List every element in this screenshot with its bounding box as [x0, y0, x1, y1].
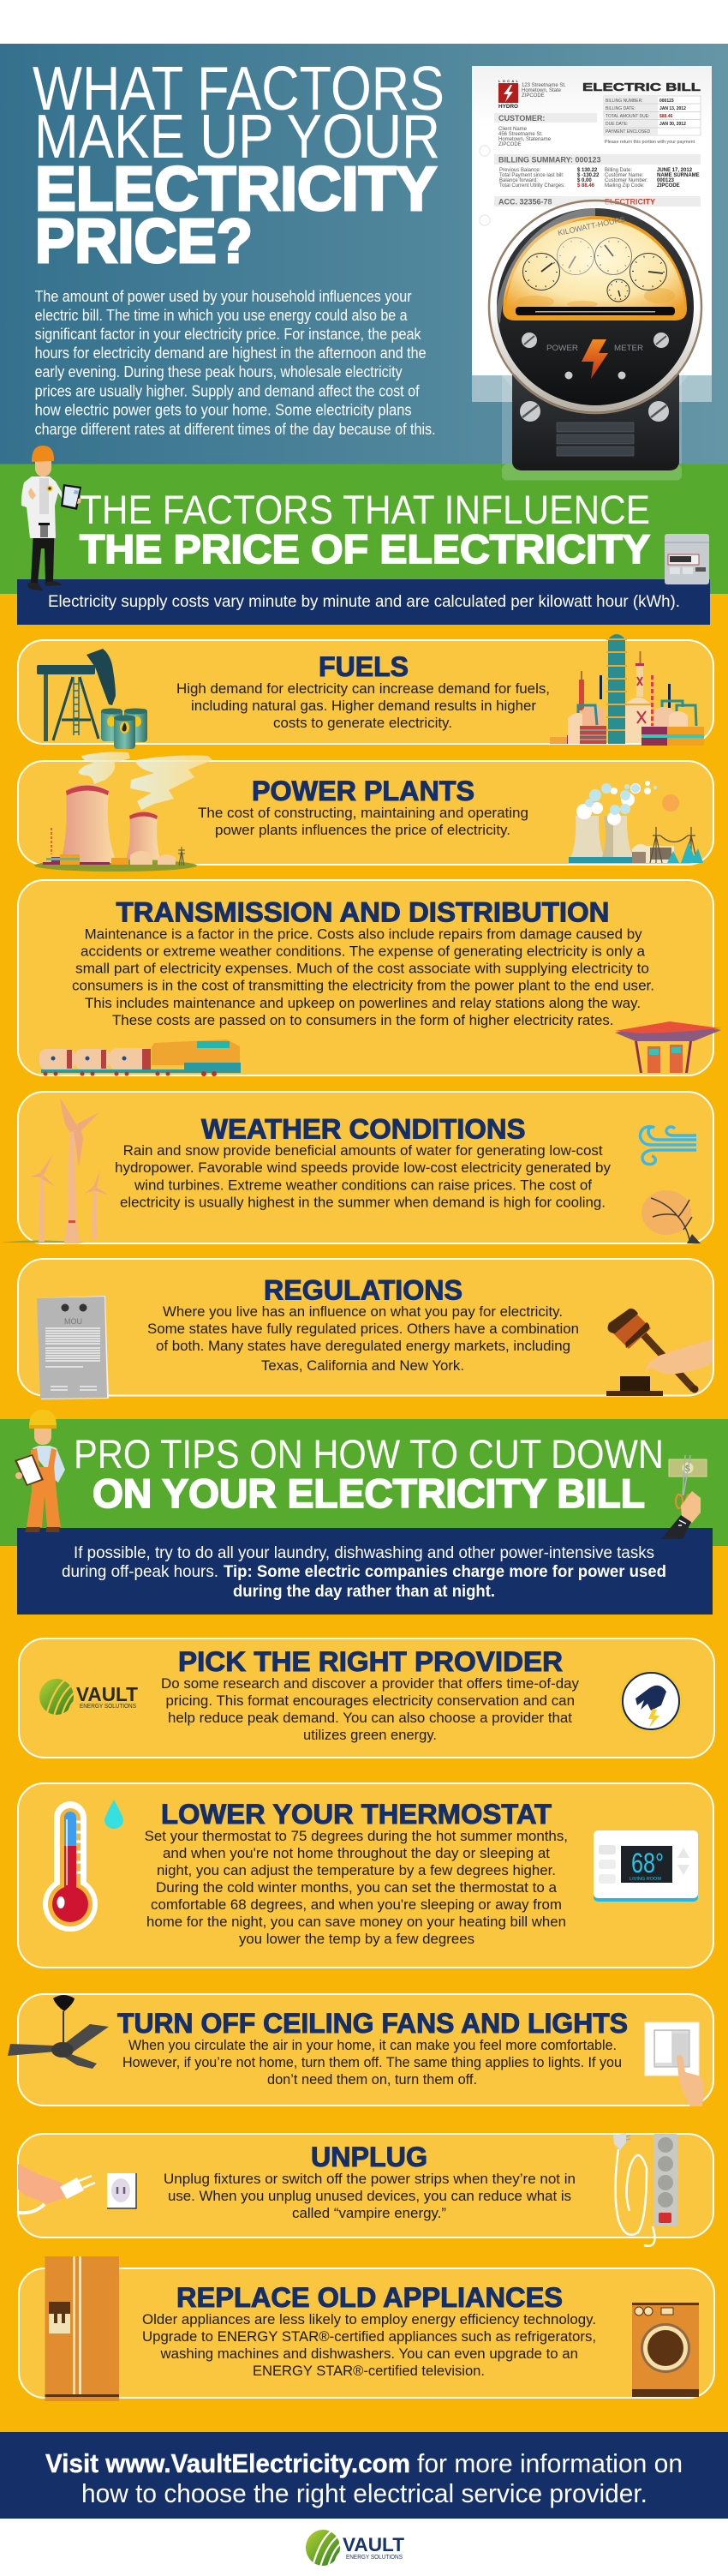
text: transmission: These costs are passed on to consumers in the form of higher electricity rates. [112, 1012, 613, 1028]
title: ELECTRICITY [35, 155, 437, 224]
icon: thermometer [43, 1801, 98, 1932]
text: provider: pricing. This format encourages electricity conservation and can [166, 1692, 575, 1709]
intro paragraph: how electric power gets to your home. Some electricity plans [35, 402, 412, 419]
heading: fans: TURN OFF CEILING FANS AND LIGHTS [117, 2008, 628, 2039]
text: weather: electricity is usually highest in the summer when demand is high for cooling. [120, 1195, 606, 1210]
heading: fuels: FUELS [319, 651, 409, 682]
subheading bar: Electricity supply costs vary minute by minute and are calculated per kilowatt hour (kWh). [48, 593, 680, 611]
electric bill document: JAN 13, 2012 [659, 106, 686, 111]
gauges [522, 238, 666, 302]
text: fuels: High demand for electricity can increase demand for fuels, [176, 680, 550, 697]
electric bill document: PAYMENT ENCLOSED [606, 129, 651, 135]
text: provider: utilizes green energy. [303, 1727, 437, 1743]
text: thermostat: comfortable 68 degrees, and when you're sleeping or away from [151, 1896, 562, 1913]
icon: document [37, 1296, 109, 1399]
text: unplug: use. When you unplug unused devices, you can reduce what is [168, 2188, 571, 2204]
electric bill document: BILLING SUMMARY: 000123 [498, 156, 601, 165]
worker character [15, 1410, 65, 1532]
icon: thermostat: LIVING ROOM [630, 1877, 661, 1882]
electric bill document: 456 Streetname St. [498, 132, 543, 137]
heading: provider: PICK THE RIGHT PROVIDER [178, 1646, 563, 1677]
panel: regulations [18, 1259, 713, 1399]
electric bill document: Hometown, State [522, 88, 562, 93]
logo: vault: VAULT [76, 1683, 138, 1705]
text: power plants: power plants influences the price of electricity. [215, 822, 510, 838]
electric bill document: Customer Number: [605, 178, 648, 183]
text: transmission: accidents or extreme weather conditions. The expense of generating electricity is only a [81, 943, 646, 959]
icon: document: MOU [64, 1317, 82, 1326]
text: appliances [142, 2311, 596, 2379]
icon: hand unplugging [18, 2164, 136, 2213]
section heading: PRO TIPS ON HOW TO CUT DOWN [74, 1431, 664, 1477]
text: fans [122, 2037, 622, 2088]
text: thermostat: and when you're not home throughout the day or sleeping at [163, 1845, 550, 1861]
call to action footer: for more information on [417, 2448, 683, 2478]
heading: thermostat: LOWER YOUR THERMOSTAT [161, 1799, 552, 1830]
text: unplug: Unplug fixtures or switch off the power strips when they’re not in [164, 2171, 576, 2187]
electric bill document: Mailing Zip Code: [605, 183, 645, 189]
text: fuels [176, 680, 550, 731]
power meter: KILOWATT-HOURS [557, 215, 626, 237]
electric bill document: 000123 [659, 99, 674, 104]
icon: refrigerator [45, 2256, 119, 2401]
text: weather: wind turbines. Extreme weather conditions can raise prices. The cost of [134, 1177, 592, 1194]
icon: power strip [613, 2133, 677, 2246]
text: regulations: Some states have fully regulated prices. Others have a combination [147, 1321, 579, 1337]
section band: pro tips [0, 1410, 728, 1614]
electric bill document: JAN 30, 2012 [659, 122, 686, 127]
icon: thermostat [594, 1830, 698, 1902]
text: thermostat: you lower the temp by a few degrees [239, 1931, 474, 1947]
section heading: THE FACTORS THAT INFLUENCE [80, 487, 650, 532]
electric bill document: Billing Date: [605, 168, 632, 173]
call to action footer: Visit www.VaultElectricity.com [45, 2448, 410, 2478]
intro bar [17, 1528, 713, 1614]
intro bar: during off-peak hours. [62, 1563, 218, 1581]
intro paragraph: electric bill. The time in which you use energy could also be a [35, 307, 408, 324]
icon: washing machine [632, 2303, 699, 2397]
panel: unplug [18, 2133, 713, 2246]
section heading: ON YOUR ELECTRICITY BILL [92, 1471, 645, 1516]
text: thermostat: Set your thermostat to 75 degrees during the hot summer months, [145, 1828, 568, 1844]
electric bill document: Total Current Utility Charges: [499, 183, 565, 189]
icon: oil pump [37, 649, 147, 749]
electric bill document: Balance forward: [499, 178, 538, 183]
electric bill document: Hometown, Statename [498, 137, 552, 142]
panel: fuels [18, 634, 713, 749]
electric bill document: ZIPCODE [498, 142, 522, 147]
electric bill document: ACC. 32356-78 [498, 197, 552, 206]
text: appliances: Older appliances are less likely to employ energy efficiency technology. [142, 2311, 596, 2327]
heading: appliances: REPLACE OLD APPLIANCES [176, 2282, 563, 2313]
icon: refinery [550, 634, 704, 746]
electric bill document: BILLING DATE: [606, 106, 636, 111]
panel: pick the right provider [19, 1638, 714, 1758]
icon: cooling towers [34, 752, 212, 872]
intro paragraph: charge different rates at different times of the day because of this. [35, 421, 436, 438]
text: regulations: of both. Many states have deregulated energy markets, including [156, 1338, 570, 1354]
text: transmission: small part of electricity expenses. Much of the cost associate with supplying electricity to [75, 961, 649, 977]
electric bill document: HYDRO [498, 105, 518, 110]
text: transmission: This includes maintenance and upkeep on powerlines and relay stations along the way. [85, 995, 641, 1011]
intro paragraph: hours for electricity demand are highest in the afternoon and the [35, 344, 427, 362]
electric bill document: Previous Balance: [499, 168, 541, 173]
footer logo: vault: VAULT [343, 2534, 405, 2555]
electric bill document: 123 Streetname St. [522, 83, 566, 88]
title: PRICE? [35, 207, 253, 276]
icon: cutting money [661, 1455, 707, 1539]
intro bar: If possible, try to do all your laundry, dishwashing and other power-intensive tasks [74, 1544, 654, 1562]
text: fuels: costs to generate electricity. [273, 715, 452, 731]
icon: small electric meter [665, 534, 709, 584]
text: fans: However, if you’re not home, turn them off. The same thing applies to lights. If you [122, 2054, 622, 2070]
text: provider [161, 1675, 579, 1743]
text: appliances: Upgrade to ENERGY STAR®-certified appliances such as refrigerators, [142, 2328, 596, 2345]
text: transmission: consumers is in the cost of transmitting the electricity from the power plant to the end user. [72, 977, 654, 994]
text: appliances: washing machines and dishwashers. You can even upgrade to an [160, 2345, 578, 2362]
icon: wind [641, 1127, 696, 1165]
icon: tanker train [39, 1039, 241, 1076]
logo: vault: ENERGY SOLUTIONS [80, 1704, 136, 1710]
electric bill document: BILLING NUMBER: [606, 99, 643, 104]
electric bill document: $ -130.22 [577, 173, 600, 178]
text: thermostat: During the cold winter months, you can set the thermostat to a [156, 1879, 558, 1896]
intro paragraph [35, 288, 436, 438]
section heading [74, 1431, 664, 1516]
intro paragraph: prices are usually higher. Supply and demand affect the cost of [35, 382, 420, 399]
electric bill document: ZIPCODE [522, 93, 545, 99]
icon: wind turbines [0, 1098, 109, 1243]
text: thermostat [145, 1828, 568, 1947]
heading: power plants: POWER PLANTS [252, 776, 474, 806]
heading: weather: WEATHER CONDITIONS [201, 1113, 526, 1144]
electric bill document: LOCAL [498, 79, 519, 83]
icon: cutting money: $ [685, 1465, 690, 1474]
text: provider: Do some research and discover a provider that offers time-of-day [161, 1675, 579, 1692]
power meter [480, 191, 711, 480]
electric bill document: 000123 [657, 178, 675, 183]
electric bill document [472, 66, 712, 402]
text: weather [115, 1142, 611, 1210]
text: fans: When you circulate the air in your home, it can make you feel more comfortable. [128, 2037, 617, 2053]
intro paragraph: significant factor in your electricity price. For instance, the peak [35, 326, 421, 343]
panel: replace old appliances [19, 2256, 714, 2401]
heading: unplug: UNPLUG [311, 2142, 427, 2172]
text: regulations: Where you live has an influence on what you pay for electricity. [163, 1303, 563, 1320]
text: weather: hydropower. Favorable wind speeds provide low-cost electricity generated by [115, 1159, 611, 1176]
text: transmission [72, 926, 654, 1028]
icon: nuclear plant [569, 781, 703, 863]
text: power plants [198, 805, 528, 838]
electric bill document: ELECTRICITY [605, 197, 655, 206]
electric bill document: TOTAL AMOUNT DUE: [606, 114, 649, 119]
intro paragraph: The amount of power used by your household influences your [35, 288, 412, 305]
footer logo: vault: ENERGY SOLUTIONS [346, 2555, 403, 2561]
text: fans: don’t need them on, turn them off. [267, 2071, 477, 2088]
panel: weather conditions [0, 1092, 713, 1243]
logo: vault [39, 1679, 138, 1716]
heading: transmission: TRANSMISSION AND DISTRIBUTION [116, 896, 610, 927]
text: unplug: called “vampire energy.” [292, 2205, 446, 2221]
electric bill document: Please return this portion with your payment [605, 140, 695, 145]
text: unplug [164, 2171, 576, 2221]
section heading: THE PRICE OF ELECTRICITY [80, 526, 650, 572]
electric bill document: JUNE 17, 2012 [657, 168, 693, 173]
electric bill document: ELECTRIC BILL [582, 81, 701, 93]
text: thermostat: night, you can adjust the temperature by a few degrees higher. [157, 1862, 556, 1878]
panel: transmission and distribution [18, 880, 721, 1076]
electric bill document: CUSTOMER: [498, 114, 545, 123]
intro bar: Tip: Some electric companies charge more for power used [224, 1563, 666, 1581]
electric bill document: Customer Name: [605, 173, 644, 178]
electric bill document: $88.46 [659, 114, 673, 119]
header panel [0, 44, 728, 480]
icon: thermostat: 68° [631, 1848, 664, 1878]
text: transmission: Maintenance is a factor in the price. Costs also include repairs from damage caused by [85, 926, 642, 942]
text: weather: Rain and snow provide beneficial amounts of water for generating low-cost [123, 1142, 603, 1159]
call to action footer [0, 2432, 728, 2519]
text: appliances: ENERGY STAR®-certified television. [253, 2363, 485, 2379]
text: thermostat: home for the night, you can save money on your heating bill when [146, 1914, 566, 1930]
icon: windy tree [641, 1190, 701, 1243]
text: regulations [147, 1303, 579, 1374]
electric bill document: $ 130.22 [577, 168, 598, 173]
electric bill document: DUE DATE: [606, 122, 628, 127]
text: provider: help reduce peak demand. You can also choose a provider that [168, 1710, 572, 1726]
icon: ceiling fan [8, 1995, 109, 2069]
power meter: METER [614, 344, 644, 352]
text: fuels: including natural gas. Higher demand results in higher [191, 698, 536, 714]
subheading bar [17, 579, 710, 625]
section heading [80, 487, 650, 572]
panel: lower your thermostat [18, 1783, 713, 1968]
title: MAKE UP YOUR [34, 103, 440, 171]
panel: turn off ceiling fans and lights [8, 1994, 713, 2106]
electric bill document: NAME SURNAME [657, 173, 700, 178]
heading: regulations: REGULATIONS [264, 1275, 462, 1306]
icon: fuel station [615, 1021, 721, 1073]
text: power plants: The cost of constructing, maintaining and operating [198, 805, 528, 821]
engineer character [21, 446, 81, 590]
electric bill document: $ 88.46 [577, 183, 595, 189]
power meter: POWER [546, 344, 579, 352]
title [33, 55, 445, 276]
text: regulations: Texas, California and New York. [261, 1357, 464, 1374]
panel: power plants [18, 752, 713, 872]
icon: light switch [645, 2022, 704, 2106]
icon: water drop [104, 1800, 123, 1829]
title: WHAT FACTORS [33, 55, 445, 123]
intro bar: during the day rather than at night. [233, 1583, 495, 1601]
icon: gavel [606, 1309, 713, 1396]
call to action footer: how to choose the right electrical service provider. [81, 2478, 647, 2508]
electric bill document: $ 0.00 [577, 178, 592, 183]
electric bill document: ZIPCODE [657, 183, 680, 189]
electric bill document: Total Payment since last bill: [499, 173, 564, 178]
screws [522, 332, 669, 379]
electric bill document: Client Name [498, 127, 528, 132]
section band: factors [0, 446, 728, 625]
footer logo: vault [306, 2530, 405, 2567]
icon: hand and bolt [618, 1668, 683, 1734]
intro paragraph: early evening. During these peak hours, wholesale electricity [35, 363, 403, 380]
